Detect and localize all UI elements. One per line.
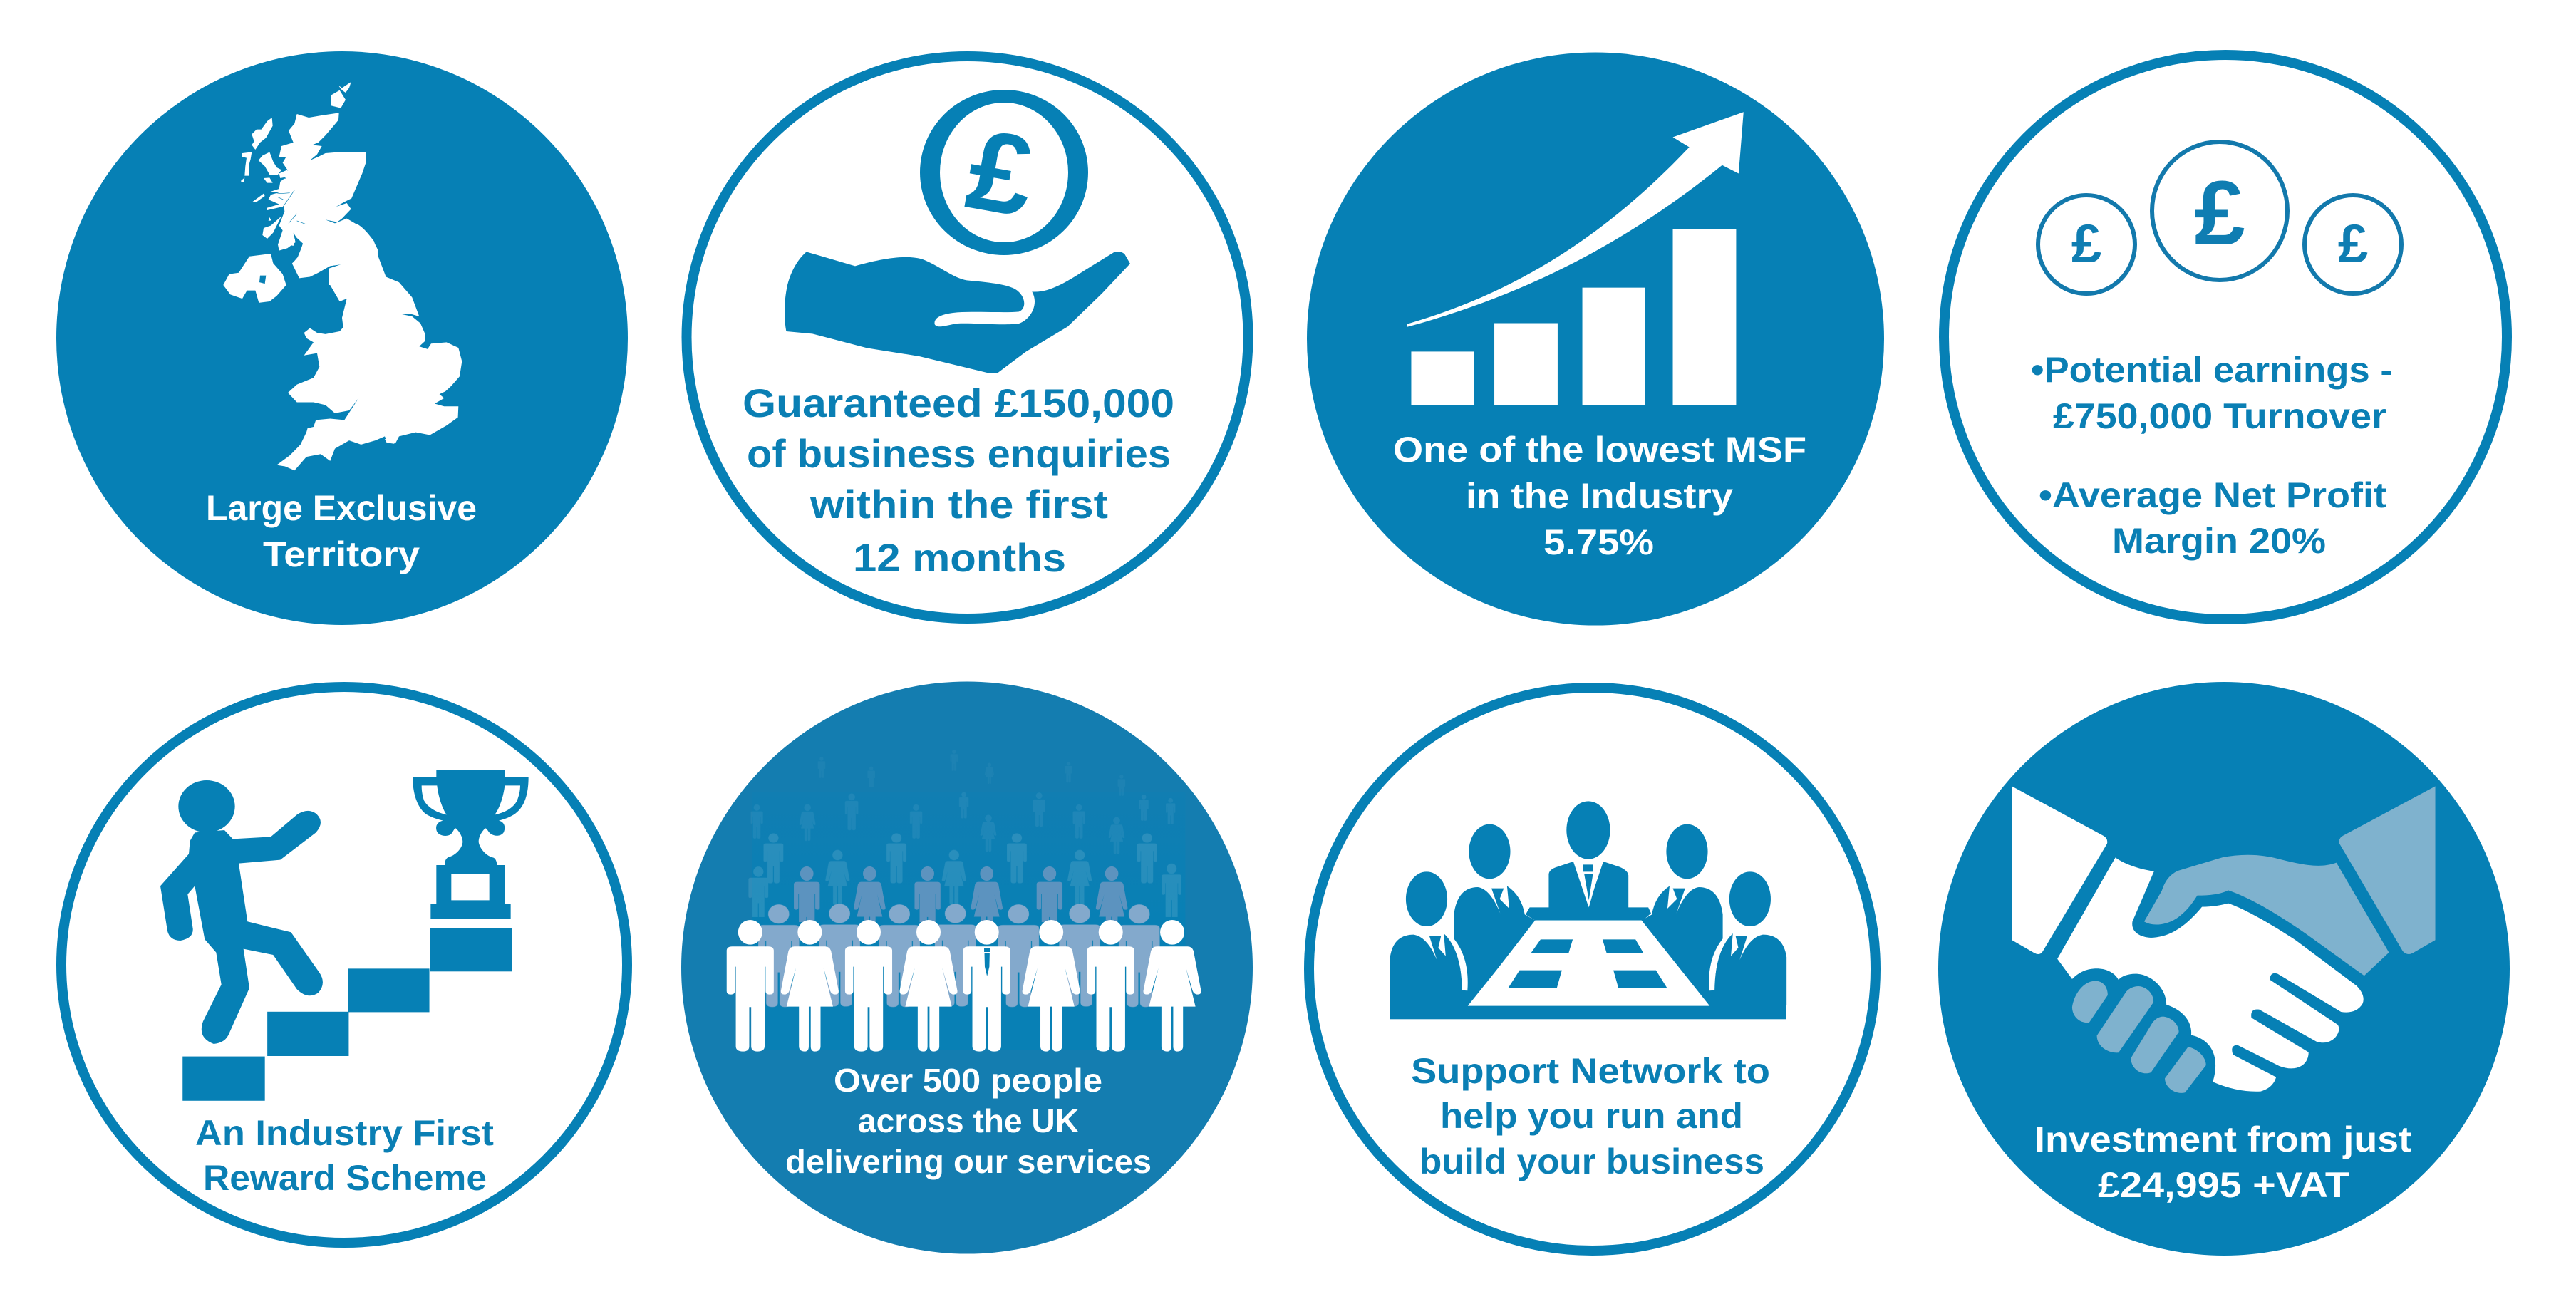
icon: three pound coins <box>2038 142 2401 294</box>
icon: pound coin in hand: £ <box>958 105 1043 241</box>
text: earnings and margin <box>2031 350 2393 561</box>
text: earnings and margin: •Potential earnings - <box>2031 350 2393 390</box>
text: earnings and margin: •Average Net Profit <box>2039 475 2386 515</box>
caption <box>743 381 1174 580</box>
icon: three pound coins: £ <box>2194 162 2245 264</box>
text: earnings and margin: £750,000 Turnover <box>2053 396 2386 436</box>
caption: of business enquiries <box>747 431 1171 476</box>
panel: potential earnings <box>1944 55 2507 619</box>
caption <box>206 488 477 574</box>
caption: Guaranteed £150,000 <box>743 381 1174 425</box>
circle background <box>1307 53 1884 626</box>
panel: reward scheme <box>61 687 627 1243</box>
caption <box>2034 1119 2411 1205</box>
panel: over 500 people <box>681 681 1253 1254</box>
caption <box>1411 1051 1770 1181</box>
circle outline <box>1944 55 2507 619</box>
icon: trophy on top step <box>413 770 529 971</box>
caption: Large Exclusive <box>206 488 477 528</box>
caption: Reward Scheme <box>203 1158 487 1198</box>
icon: UK map <box>223 82 462 470</box>
caption: Investment from just <box>2034 1119 2411 1159</box>
icon: stairs <box>182 968 430 1101</box>
icon: pound coin in hand <box>785 90 1130 373</box>
chart: rising bars with arrow <box>1407 112 1744 405</box>
icon: climbing figure <box>160 780 323 1044</box>
caption: Over 500 people <box>834 1062 1102 1099</box>
circle background <box>1938 682 2510 1256</box>
caption: An Industry First <box>195 1113 494 1153</box>
text: earnings and margin: Margin 20% <box>2112 521 2326 561</box>
caption: in the Industry <box>1466 476 1733 516</box>
circle outline <box>687 56 1248 619</box>
icon: crowd of people <box>727 750 1201 1052</box>
circle outline <box>61 687 627 1243</box>
circle outline <box>1309 688 1876 1251</box>
circle background <box>56 51 628 625</box>
caption: £24,995 +VAT <box>2098 1165 2349 1205</box>
caption: build your business <box>1419 1142 1764 1181</box>
caption: Territory <box>263 534 420 574</box>
caption: help you run and <box>1440 1096 1743 1136</box>
caption: 5.75% <box>1543 522 1654 562</box>
caption: delivering our services <box>785 1143 1152 1180</box>
panel: support network <box>1309 688 1876 1251</box>
caption <box>1393 430 1806 562</box>
panel: investment <box>1938 682 2510 1256</box>
panel: lowest MSF <box>1307 53 1884 626</box>
caption <box>785 1062 1152 1180</box>
caption: within the first <box>809 482 1108 527</box>
caption <box>195 1113 494 1198</box>
caption: Support Network to <box>1411 1051 1770 1091</box>
icon: boardroom meeting <box>1390 801 1786 1019</box>
icon: three pound coins: £ <box>2338 214 2368 274</box>
icon: handshake <box>2012 786 2436 1093</box>
icon: three pound coins: £ <box>2071 214 2101 274</box>
panel: guaranteed enquiries <box>687 56 1248 619</box>
caption: 12 months <box>853 535 1066 580</box>
circle background <box>681 681 1253 1254</box>
caption: across the UK <box>858 1102 1079 1139</box>
caption: One of the lowest MSF <box>1393 430 1806 470</box>
panel: large exclusive territory <box>56 51 628 625</box>
